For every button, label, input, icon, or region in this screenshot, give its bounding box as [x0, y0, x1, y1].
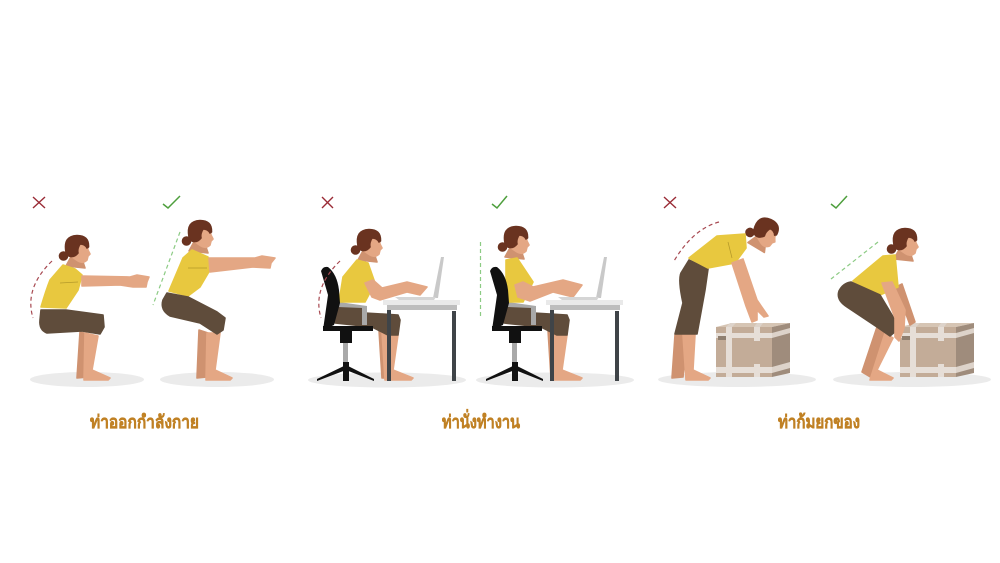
floor shadow [308, 372, 466, 388]
heading: lifting posture: ท่าก้มยกของ [778, 412, 860, 432]
heading: desk posture: ท่านั่งทำงาน [442, 409, 521, 432]
squatting figure, straight back [162, 220, 275, 380]
office chair [486, 267, 543, 381]
heading: exercise posture: ท่าออกกำลังกาย [90, 412, 199, 432]
floor shadow [476, 372, 634, 388]
panel: lifting posture, wrong [658, 197, 816, 387]
desk with laptop [383, 257, 460, 381]
cardboard box [716, 323, 790, 377]
seated figure, hunched over laptop [335, 230, 427, 380]
straight back guide [480, 242, 482, 316]
floor shadow [833, 372, 991, 387]
figure bending from the waist [672, 212, 783, 380]
figure lifting with bent knees [838, 228, 918, 380]
panel: desk posture, wrong [308, 197, 466, 388]
icon: wrong cross [33, 197, 45, 208]
icon: correct check [492, 196, 507, 208]
curved back guide [674, 222, 719, 261]
panel: exercise posture, wrong [30, 197, 149, 387]
icon: wrong cross [322, 197, 333, 208]
office chair [317, 267, 374, 381]
panel: exercise posture, correct [153, 196, 275, 387]
floor shadow [160, 372, 274, 387]
desk with laptop [546, 257, 623, 381]
panel: lifting posture, correct [831, 196, 991, 387]
icon: correct check [163, 196, 180, 208]
straight back guide [831, 242, 878, 279]
curved back guide [31, 261, 52, 318]
squatting figure, rounded back [40, 236, 149, 380]
icon: correct check [831, 196, 847, 208]
panel: desk posture, correct [476, 196, 634, 388]
curved back guide [319, 261, 340, 318]
floor shadow [30, 372, 144, 387]
seated figure, upright [498, 226, 582, 380]
cardboard box [900, 323, 974, 377]
floor shadow [658, 372, 816, 387]
icon: wrong cross [664, 197, 676, 208]
straight back guide [153, 232, 180, 305]
